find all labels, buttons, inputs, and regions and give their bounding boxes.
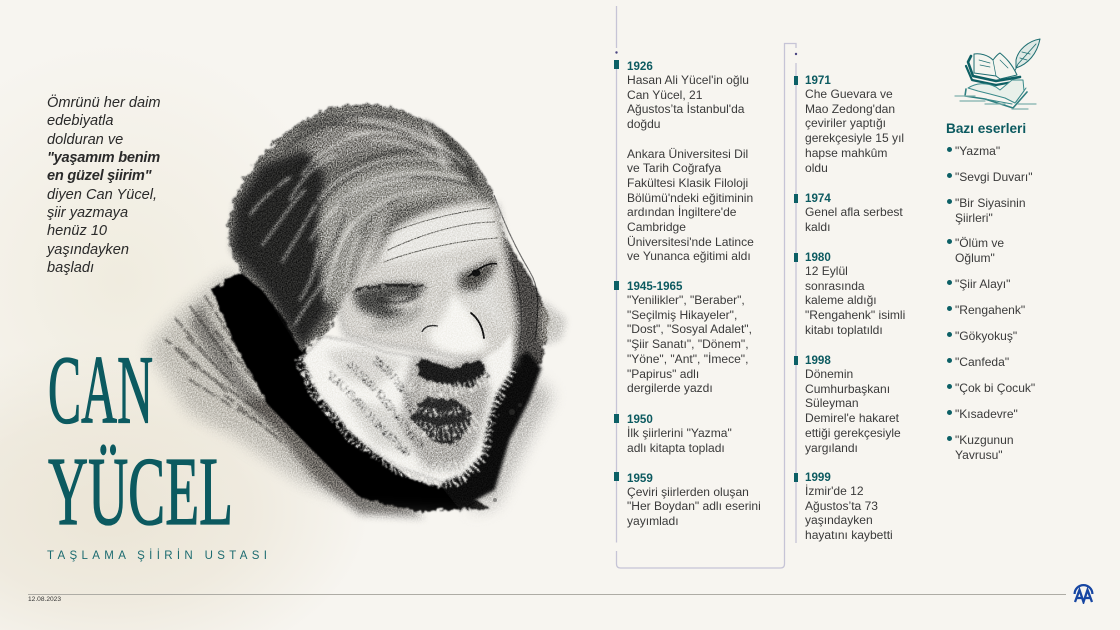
event 1999: hayatını kaybetti [805,528,893,542]
hair strands [250,115,475,325]
event 1971: gerekçesiyle 15 yıl [805,131,904,145]
intro paragraph: edebiyatla [47,113,114,129]
event 1926: Cambridge [627,220,686,234]
work: Sevgi Duvarı: "Sevgi Duvarı" [955,170,1033,184]
forehead wrinkles [384,208,498,262]
intro paragraph: yaşındayken [47,242,129,258]
event 1974: kaldı [805,220,830,234]
event 1945-1965: 1945-1965 [627,280,682,293]
event 1998: ettiği gerekçesiyle [805,426,901,440]
work: Rengahenk: "Rengahenk" [955,303,1025,317]
event 1971: Mao Zedong'dan [805,102,895,116]
intro paragraph: Ömrünü her daim [47,95,161,111]
work: Bir Siyasinin Şiirleri [955,196,1026,225]
event 1971: çeviriler yaptığı [805,116,886,130]
event 1998: Cumhurbaşkanı [805,382,890,396]
event 1926: Hasan Ali Yücel'in oğlu [627,73,749,87]
subtitle: TAŞLAMA ŞİİRİN USTASI [47,549,267,562]
timeline column two [794,74,905,542]
event 1998 [805,354,901,455]
lower book [965,80,1027,108]
intro paragraph: en güzel şiirim" [47,168,151,184]
event 1959: 1959 [627,472,653,484]
intro paragraph: dolduran ve [47,132,123,148]
event 1926: ve Tarih Coğrafya [627,161,721,175]
timeline markers [614,60,619,481]
event 1980: "Rengahenk" isimli [805,308,905,322]
portrait of Can Yücel [142,102,569,523]
face [338,200,518,365]
work: Kısadevre: "Kısadevre" [955,407,1018,421]
event 1950: İlk şiirlerini "Yazma" [627,426,732,440]
event 1974: 1974 [805,192,831,205]
intro paragraph: başladı [47,260,94,276]
event 1971 [805,74,904,175]
work: Kuzgunun Yavrusu: "Kuzgunun [955,433,1014,447]
event 1950: adlı kitapta topladı [627,441,725,455]
event 1971: 1971 [805,74,831,87]
event 1999: 1999 [805,471,831,484]
coat left sketch [150,272,350,500]
event 1950: 1950 [627,413,653,426]
event 1945-1965: "Dost", "Sosyal Adalet", [627,322,752,336]
event 1998: Süleyman [805,396,859,410]
brows and eyes [352,284,426,320]
event 1926 [627,60,754,263]
event 1980: kaleme aldığı [805,293,877,307]
event 1971: Che Guevara ve [805,87,893,101]
title: Can Yücel [48,345,233,535]
event 1926: 1926 [627,60,653,73]
beard fur edge [300,358,513,484]
intro paragraph: henüz 10 [47,223,107,239]
event 1926: Fakültesi Klasik Filoloji [627,176,748,190]
work: Ölüm ve Oğlum: Oğlum" [955,251,995,265]
event 1998: 1998 [805,354,831,367]
event 1926: Ankara Üniversitesi Dil [627,147,748,161]
event 1945-1965: dergilerde yazdı [627,381,713,395]
event 1926: Ağustos’ta İstanbul'da [627,102,744,116]
list heading: Bazı eserleri [946,121,1026,136]
event 1945-1965: "Şiir Sanatı", "Dönem", [627,337,749,351]
timeline markers [794,76,798,482]
intro paragraph: diyen Can Yücel, [47,187,157,203]
event 1926: Can Yücel, 21 [627,88,702,102]
footer rule [28,594,1066,595]
right side hair [498,230,552,366]
event 1945-1965: "Yenilikler", "Beraber", [627,293,745,307]
work: Kuzgunun Yavrusu: Yavrusu" [955,448,1003,462]
timeline column one [614,60,761,528]
event 1980: 1980 [805,251,831,264]
event 1926: Bölümü'ndeki eğitiminin [627,191,753,205]
work: Ölüm ve Oğlum: "Ölüm ve [955,236,1004,250]
work: Kuzgunun Yavrusu [955,433,1014,462]
event 1998: yargılandı [805,441,858,455]
event 1971: oldu [805,161,828,175]
work: Yazma: "Yazma" [955,144,1000,158]
event 1926: doğdu [627,117,660,131]
nose [429,292,488,355]
beard [302,332,512,482]
work: Bir Siyasinin Şiirleri: Şiirleri" [955,211,993,225]
event 1945-1965: "Yöne", "Ant", "İmece", [627,352,748,366]
event 1945-1965: "Papirus" adlı [627,367,699,381]
intro paragraph: "yaşamım benim [47,150,160,166]
work: Bir Siyasinin Şiirleri: "Bir Siyasinin [955,196,1026,210]
ink strokes [955,96,1036,109]
event 1999: Ağustos’ta 73 [805,499,878,513]
event 1998: Dönemin [805,367,853,381]
work: Şiir Alayı: "Şiir Alayı" [955,277,1010,291]
event 1980: kitabı toplatıldı [805,323,883,337]
icon: AA logo [1074,584,1094,604]
icon: books and quill [954,38,1040,110]
coat black mass [212,268,490,512]
event 1980: sonrasında [805,279,865,293]
hair silhouette [228,103,505,350]
event 1971: hapse mahkûm [805,146,887,160]
work: Ölüm ve Oğlum [955,236,1004,265]
work: Gökyokuş: "Gökyokuş" [955,329,1017,343]
event 1959: "Her Boydan" adlı eserini [627,499,761,513]
moustache and chin shadows [402,356,490,470]
event 1974 [805,192,903,234]
event 1980 [805,251,905,337]
event 1999: İzmir'de 12 [805,484,864,498]
quill [1013,39,1040,75]
event 1945-1965 [627,280,752,395]
event 1926: ve Yunanca eğitimi aldı [627,249,751,263]
event 1959: Çeviri şiirlerden oluşan [627,484,749,498]
intro paragraph [46,94,161,276]
event 1945-1965: "Seçilmiş Hikayeler", [627,308,737,322]
ink splashes [484,403,522,508]
right side shadow [470,375,552,512]
event 1998: Demirel'e hakaret [805,411,899,425]
event 1974: Genel afla serbest [805,205,903,219]
work: Canfeda: "Canfeda" [955,355,1009,369]
work: Çok bi Çocuk: "Çok bi Çocuk" [955,381,1035,395]
event 1959 [627,472,761,528]
event 1999: yaşındayken [805,513,873,527]
intro paragraph: şiir yazmaya [47,205,128,221]
upper book [966,53,1020,85]
event 1999 [805,471,893,542]
event 1926: ardından İngiltere'de [627,205,736,219]
event 1959: yayımladı [627,514,679,528]
event 1980: 12 Eylül [805,264,848,278]
date: 12.08.2023 [28,596,61,603]
event 1926: Üniversitesi'nde Latince [627,235,754,249]
event 1950 [627,413,732,455]
